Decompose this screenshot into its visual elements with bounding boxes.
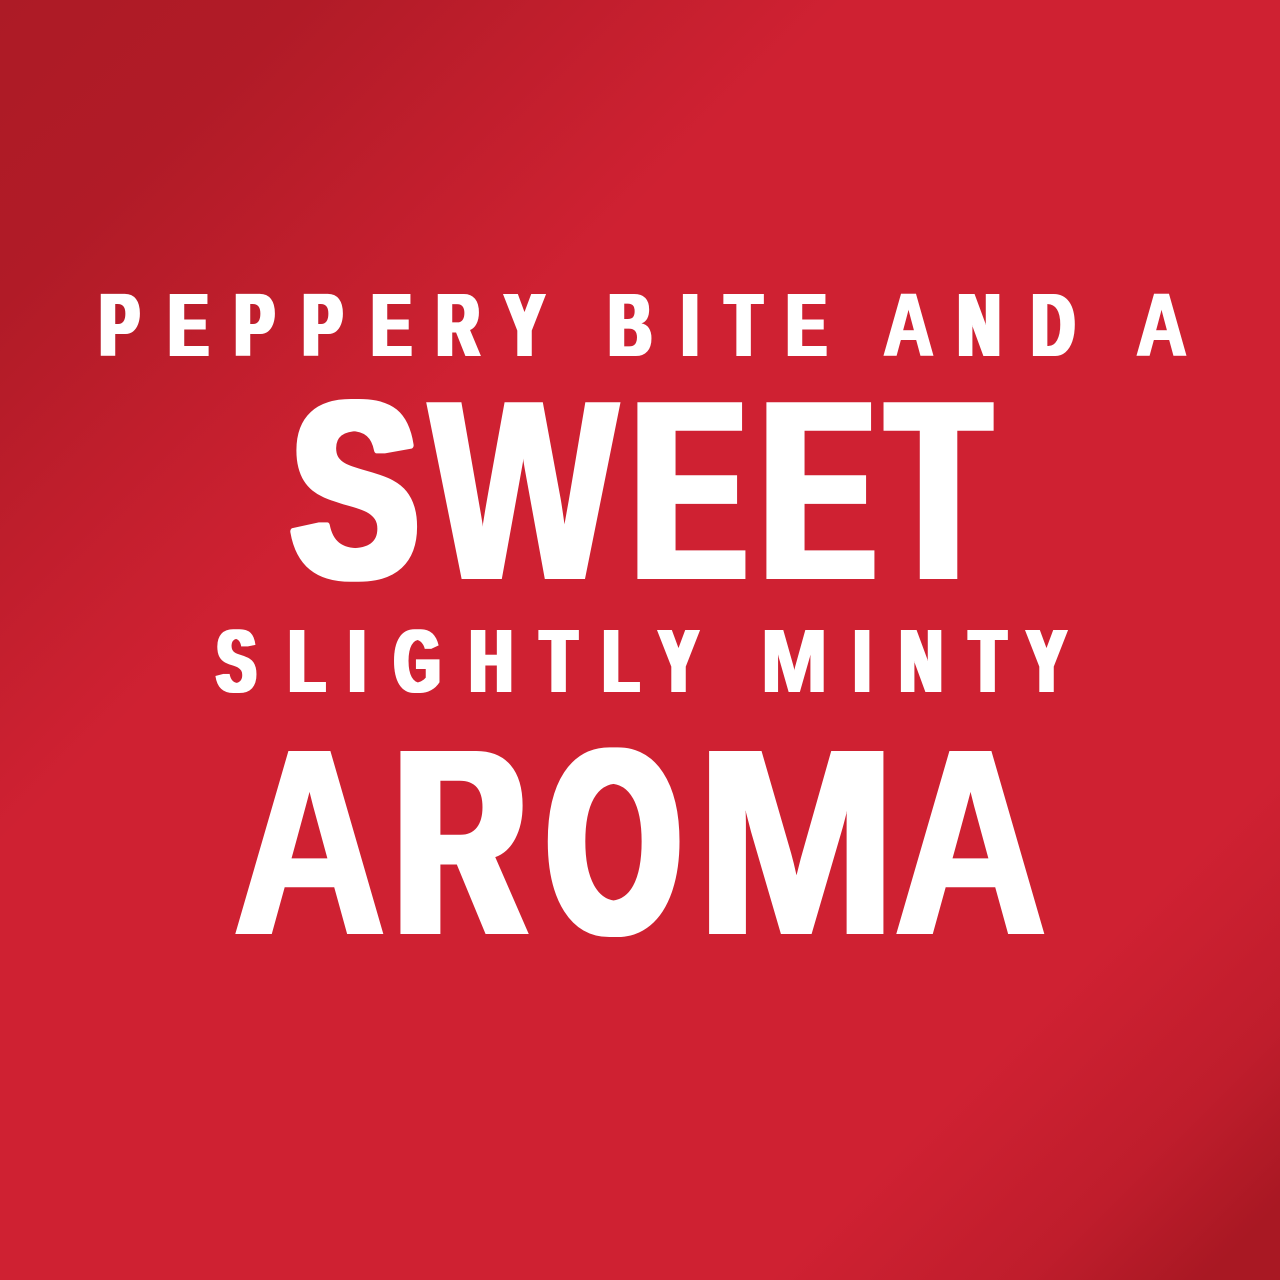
heading line: peppery bite and a: A — [1136, 276, 1187, 376]
heading line: peppery bite and a: PEPPERY BITE — [100, 275, 826, 376]
heading word: aroma: R — [395, 694, 525, 991]
heading line: peppery bite and a — [100, 275, 1187, 376]
heading word: sweet: S — [291, 351, 418, 629]
heading word: sweet: T — [889, 346, 988, 634]
heading word: sweet: E — [762, 347, 874, 633]
heading line: slightly minty: M — [761, 612, 827, 712]
heading word: aroma — [233, 693, 1047, 991]
heading line: peppery bite and a: ND — [958, 275, 1074, 376]
heading word: aroma: M — [696, 693, 897, 991]
heading line: slightly minty: SLIGHTLY — [217, 611, 698, 712]
heading word: sweet: W — [429, 347, 618, 634]
heading line: peppery bite and a: A — [883, 276, 934, 376]
heading word: aroma: O — [547, 699, 680, 986]
heading word: aroma: A — [233, 693, 386, 990]
heading word: sweet — [291, 346, 988, 634]
heading line: slightly minty — [217, 611, 1066, 712]
heading word: sweet: E — [633, 347, 745, 633]
heading word: aroma: A — [894, 693, 1047, 990]
heading line: slightly minty: INTY — [854, 611, 1066, 712]
